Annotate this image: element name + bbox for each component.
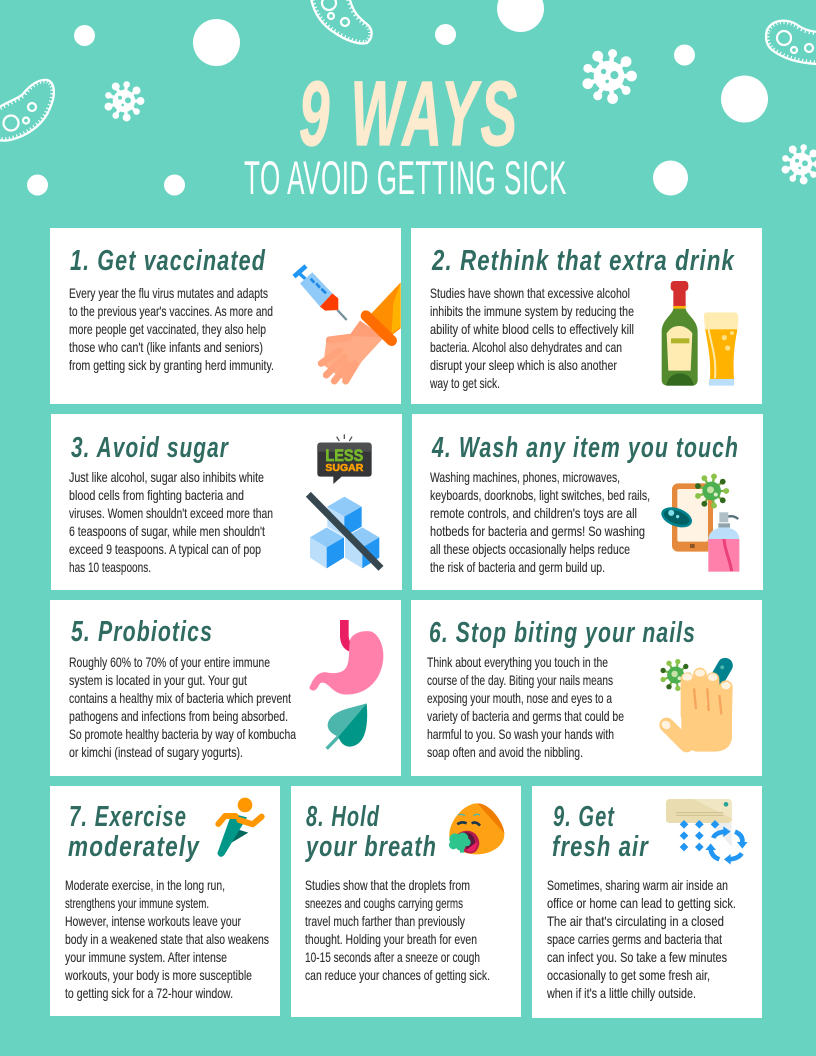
panel 6: stop biting nails: course of the day. Biting your nails means [427,672,613,688]
subtitle: TO AVOID GETTING SICK [244,151,567,204]
panel 1: get vaccinated: 1. Get vaccinated [70,245,266,277]
icon: runner [217,798,262,857]
panel 3: avoid sugar: blood cells from fighting bacteria and [69,487,244,503]
panel 8: hold breath: thought. Holding your breath for even [305,931,477,947]
panel 5: probiotics: 5. Probiotics [71,616,213,648]
panel 7: exercise: strengthens your immune system. [65,895,209,911]
panel 3: avoid sugar: 6 teaspoons of sugar, while men shouldn't [69,523,265,539]
icon: less sugar badge and cubes: LESS [325,446,363,465]
panel 8: hold breath: 10-15 seconds after a sneeze or cough [305,949,480,965]
panel 2: rethink drink [411,228,762,404]
panel 2: rethink drink: disrupt your sleep which is also another [430,357,617,373]
panel 6: stop biting nails: variety of bacteria and germs that could be [427,708,624,724]
panel 5: probiotics: or kimchi (instead of sugary yogurts). [69,744,243,760]
panel 2: rethink drink: bacteria. Alcohol also dehydrates and can [430,339,622,355]
panel 1: get vaccinated [50,228,401,404]
panel 7: exercise [50,786,280,1016]
title: 9 WAYS [299,63,520,165]
icon: phone, germs and soap [659,473,739,572]
icon: less sugar badge and cubes: SUGAR [325,463,363,474]
panel 9: fresh air: can infect you. So take a few minutes [547,949,727,965]
panel 1: get vaccinated: to the previous year's vaccines. As more and [69,303,273,319]
decorative circles [27,0,768,196]
panel 4: wash items [412,414,763,590]
panel 9: fresh air: occasionally to get some fresh air, [547,967,710,983]
icon: bacterium left [0,80,54,141]
panel 3: avoid sugar: viruses. Women shouldn't exceed more than [69,505,273,521]
icon: less sugar badge and cubes [308,434,381,568]
panel 9: fresh air: when if it's a little chilly outside. [546,985,696,1001]
panel 4: wash items: keyboards, doorknobs, light switches, bed rails, [430,487,650,503]
icon: air conditioner [666,799,748,865]
icon: bacterium top [310,0,372,43]
panel 1: get vaccinated: those who can't (like infants and seniors) [69,339,263,355]
icon: virus right [782,144,816,184]
icon: hand with germs [660,655,736,752]
panel 8: hold breath: Studies show that the droplets from [305,877,470,893]
panel 6: stop biting nails: 6. Stop biting your nails [429,617,696,649]
panel 7: exercise: 7. Exercise [69,801,187,833]
panel 3: avoid sugar: has 10 teaspoons. [69,559,151,575]
panel 2: rethink drink: inhibits the immune system by reducing the [430,303,634,319]
panel 1: get vaccinated: more people get vaccinated, they also help [69,321,266,337]
icon: virus left [105,81,144,121]
panel 8: hold breath: your breath [305,831,437,863]
panel 4: wash items: remote controls, and children's toys are all [430,505,637,521]
panel 7: exercise: body in a weakened state that also weakens [65,931,269,947]
panel 3: avoid sugar: exceed 9 teaspoons. A typical can of pop [69,541,261,557]
icon: stomach and leaf [310,620,383,749]
panel 9: fresh air: office or home can lead to getting sick. [547,895,736,911]
panel 2: rethink drink: ability of white blood cells to effectively kill [430,321,634,337]
panel 8: hold breath: can reduce your chances of getting sick. [305,967,490,983]
panel 7: exercise: workouts, your body is more susceptible [64,967,252,983]
panel 8: hold breath [291,786,521,1017]
panel 4: wash items: all these objects occasionally helps reduce [430,541,630,557]
panel 3: avoid sugar [51,414,402,590]
panel 6: stop biting nails: harmful to you. So wash your hands with [427,726,614,742]
panel 6: stop biting nails: exposing your mouth, nose and eyes to a [427,690,612,706]
panel 4: wash items: the risk of bacteria and germ build up. [430,559,605,575]
panel 5: probiotics: Roughly 60% to 70% of your entire immune [69,654,270,670]
panel 6: stop biting nails: Think about everything you touch in the [427,654,608,670]
panel 2: rethink drink: way to get sick. [429,375,500,391]
panel 1: get vaccinated: from getting sick by granting herd immunity. [69,357,274,373]
panel 7: exercise: to getting sick for a 72-hour window. [65,985,233,1001]
panel 5: probiotics: So promote healthy bacteria by way of kombucha [69,726,296,742]
panel 8: hold breath: 8. Hold [306,801,380,833]
panel 9: fresh air: 9. Get [553,801,615,833]
panel 3: avoid sugar: Just like alcohol, sugar also inhibits white [69,469,264,485]
panel 5: probiotics: contains a healthy mix of bacteria which prevent [69,690,291,706]
panel 9: fresh air [532,786,762,1018]
panel 9: fresh air: fresh air [552,831,649,863]
panel 6: stop biting nails: soap often and avoid the nibbling. [427,744,583,760]
icon: virus center [582,49,637,104]
panel 9: fresh air: The air that's circulating in a closed [547,913,724,929]
panel 1: get vaccinated: Every year the flu virus mutates and adapts [69,285,268,301]
panel 9: fresh air: Sometimes, sharing warm air inside an [547,877,728,893]
panel 8: hold breath: travel much farther than previously [305,913,465,929]
panel 7: exercise: moderately [68,831,200,863]
panel 7: exercise: However, intense workouts leave your [65,913,241,929]
panel 2: rethink drink: Studies have shown that excessive alcohol [430,285,630,301]
icon: bottle and beer [662,281,740,386]
icon: bacterium right [766,21,816,64]
panel 7: exercise: your immune system. After intense [65,949,227,965]
panel 8: hold breath: sneezes and coughs carrying germs [305,895,463,911]
panel 5: probiotics [50,600,401,776]
panel 5: probiotics: pathogens and infections from being absorbed. [69,708,288,724]
icon: syringe and arm [294,266,401,383]
panel 4: wash items: Washing machines, phones, microwaves, [430,469,620,485]
panel 4: wash items: hotbeds for bacteria and germs! So washing [430,523,645,539]
icon: sick face [449,803,504,854]
panel 5: probiotics: system is located in your gut. Your gut [69,672,247,688]
panel 7: exercise: Moderate exercise, in the long run, [65,877,225,893]
panel 3: avoid sugar: 3. Avoid sugar [71,432,229,464]
panel 6: stop biting nails [411,600,762,776]
panel 9: fresh air: space carries germs and bacteria that [547,931,722,947]
